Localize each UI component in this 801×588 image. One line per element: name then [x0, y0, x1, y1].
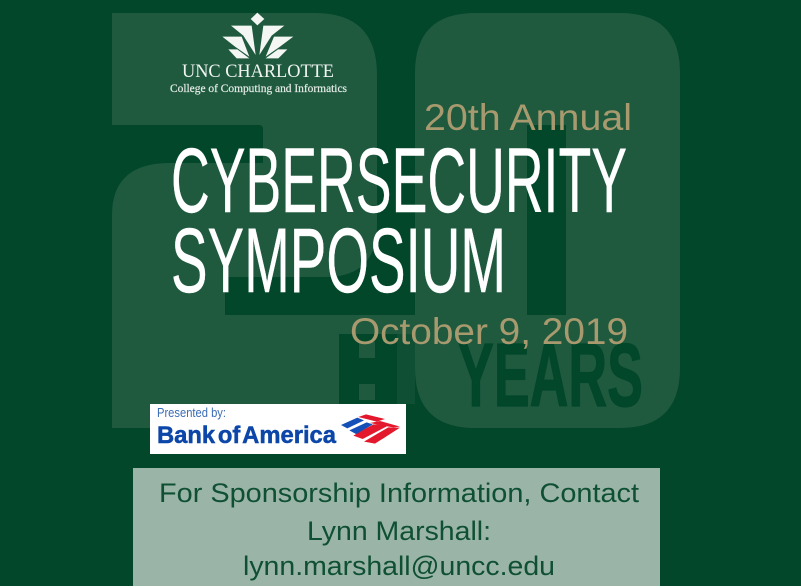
date: October 9, 2019: [350, 311, 628, 352]
background: large numeral 20 and YEARS watermark: [112, 13, 680, 428]
icon: flag: [341, 414, 400, 444]
contact line 2: Lynn Marshall:: [307, 516, 491, 546]
logo subtitle: College of Computing and Informatics: [170, 83, 348, 95]
icon: UNC Charlotte crown: [222, 13, 293, 58]
contact email: lynn.marshall@uncc.edu: [243, 551, 555, 581]
logo wordmark: UNC CHARLOTTE: [182, 61, 334, 82]
sponsor name: Bank of America: [157, 422, 336, 449]
subtitle: 20th Annual: 20th Annual: [424, 97, 632, 138]
logo: UNC Charlotte: [170, 13, 348, 95]
title line 2: SYMPOSIUM: [171, 210, 506, 312]
contact line 1: For Sponsorship Information, Contact: [159, 478, 640, 508]
title: [171, 130, 627, 312]
sponsor logo: Bank of America: [150, 404, 406, 454]
panel: sponsorship contact: [133, 468, 660, 588]
presented by label: Presented by:: [157, 406, 226, 420]
background: large numeral 20 and YEARS watermark: YEARS: [458, 326, 643, 426]
